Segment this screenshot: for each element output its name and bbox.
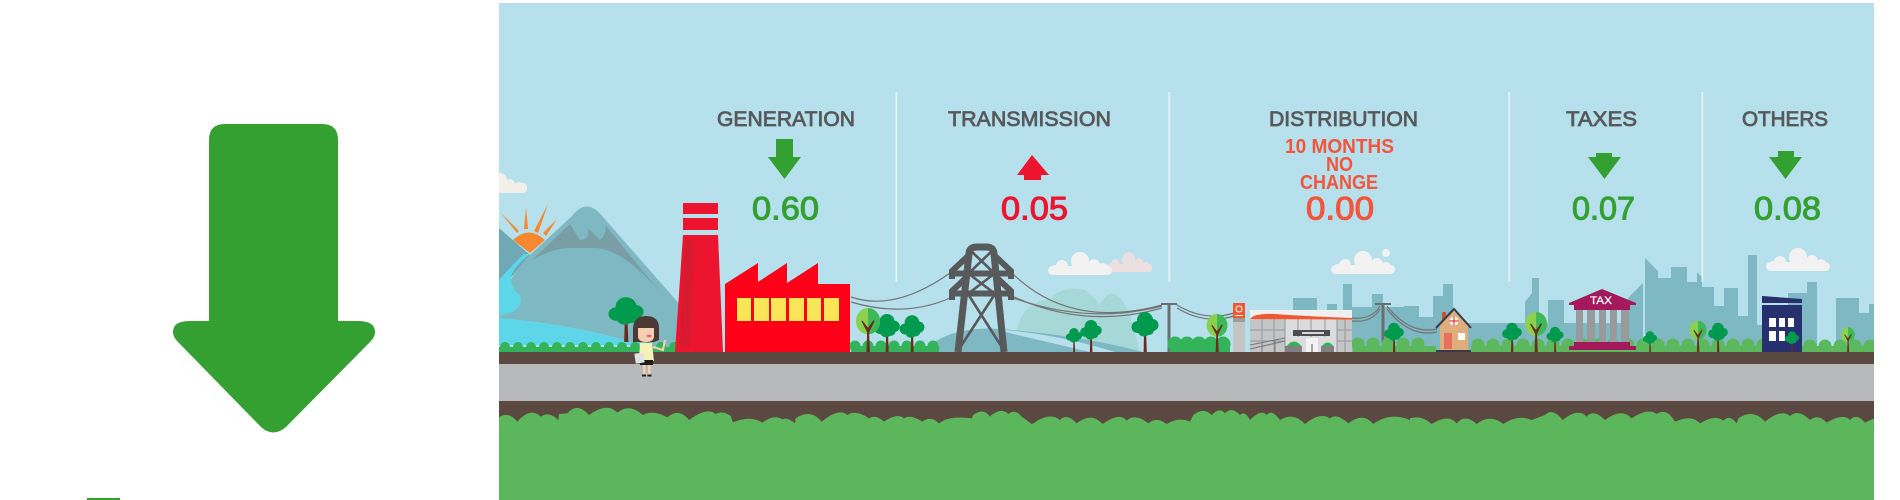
tax label: TAX: [1590, 295, 1613, 307]
icon: down arrow: [1769, 151, 1802, 179]
ground strip: upper soil: [499, 352, 1874, 364]
column: others: [1742, 108, 1828, 226]
icon: up arrow: [1017, 155, 1049, 180]
heading: taxes: TAXES: [1566, 108, 1637, 131]
icon: down arrow: [768, 139, 801, 179]
power lines: [851, 273, 1437, 333]
sign tower: [1233, 303, 1245, 352]
note: 10 months no change: [1285, 136, 1394, 194]
house: [1436, 309, 1471, 352]
heading: others: OTHERS: [1742, 108, 1828, 131]
trees: light canopy: [856, 308, 1855, 352]
utility pole 1: [1161, 303, 1177, 352]
cropped lettering fragment: [87, 498, 120, 500]
divider lines: [896, 92, 1703, 282]
cloud: distribution: [1331, 249, 1395, 274]
office building: [1762, 296, 1802, 352]
column: transmission: [948, 108, 1111, 226]
grass foreground: [499, 408, 1874, 500]
chimney: [675, 203, 723, 352]
value: 0.60: 0.60: [752, 190, 819, 226]
column: taxes: [1566, 108, 1637, 226]
cloud: others: [1766, 248, 1830, 271]
distribution building: [1250, 310, 1352, 352]
column: generation: [717, 108, 855, 226]
ground bushes: left: [499, 347, 680, 352]
road: [499, 364, 1874, 401]
character: woman: [633, 316, 665, 376]
utility pole 2: [1375, 303, 1391, 352]
ground bushes: centre and right: [851, 344, 1874, 352]
ground strip: lower soil: [499, 401, 1874, 433]
large green down arrow: [173, 124, 375, 432]
note: 10 months no change: NO: [1326, 154, 1353, 176]
icon: sun: [500, 204, 557, 253]
heading: transmission: TRANSMISSION: [948, 108, 1111, 131]
value: 0.00: 0.00: [1306, 190, 1374, 226]
value: 0.08: 0.08: [1754, 190, 1821, 226]
heading: distribution: DISTRIBUTION: [1269, 108, 1418, 131]
column: distribution: [1269, 108, 1418, 226]
mountains with sun and river: [499, 204, 682, 352]
tax building: [1569, 289, 1636, 350]
transmission tower: [952, 247, 1011, 352]
hills behind tower: [921, 289, 1143, 352]
clouds: tower pair: [1048, 252, 1152, 275]
note: 10 months no change: CHANGE: [1300, 172, 1378, 194]
factory: [725, 263, 850, 352]
panel: scene background sky: [499, 3, 1874, 500]
icon: down arrow: [1588, 153, 1621, 179]
value: 0.05: 0.05: [1001, 190, 1068, 226]
tree beside mountain: [608, 297, 644, 342]
heading: generation: GENERATION: [717, 108, 855, 131]
trees: dark canopy: [874, 312, 1728, 352]
value: 0.07: 0.07: [1572, 190, 1635, 226]
note: 10 months no change: 10 MONTHS: [1285, 136, 1394, 158]
skyline: city silhouettes: [1293, 255, 1874, 352]
cloud: far left: [499, 173, 527, 193]
